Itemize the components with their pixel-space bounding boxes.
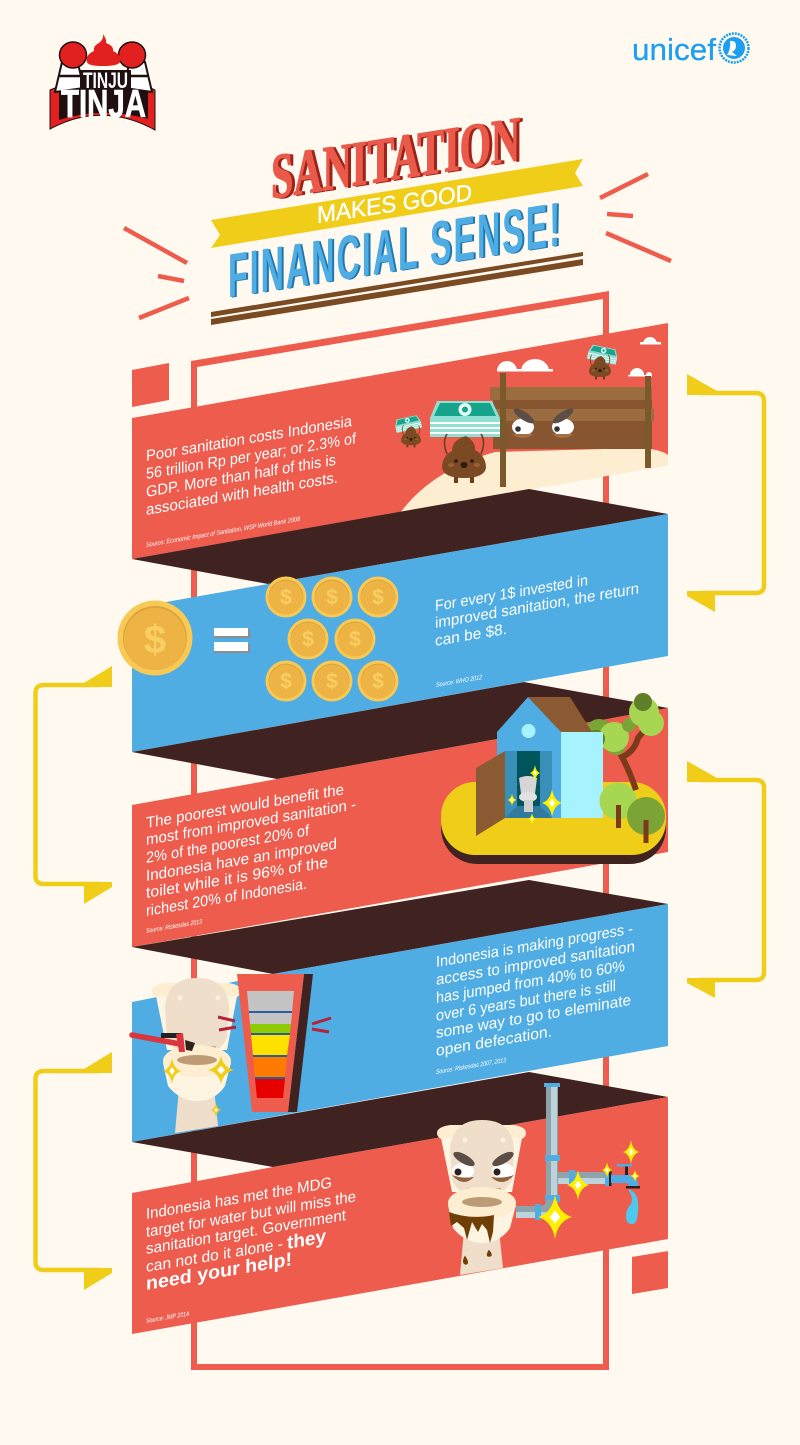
- red motion marks: [218, 1017, 331, 1032]
- panel 5 source: Source: JMP 2014: [146, 1311, 189, 1325]
- title: SANITATION: [271, 103, 523, 213]
- brown stripes: [211, 252, 583, 325]
- sanitation gauge: [237, 974, 313, 1112]
- red frame: [191, 291, 609, 1370]
- panel 4 background: [132, 904, 668, 1142]
- panel 2 text: can be $8.: [435, 621, 507, 650]
- panel 3 text: toilet while it is 96% of the: [146, 854, 328, 902]
- panel 3 source: Source: Riskesdas 2013: [146, 918, 202, 935]
- red square top left: [132, 363, 169, 407]
- panel 4 text: access to improved sanitation: [436, 938, 635, 989]
- panel 2 source: Source: WHO 2012: [436, 674, 482, 689]
- icon: eight coins: $: [302, 628, 314, 651]
- tree: large: [585, 693, 664, 790]
- logo: Tinju Tinja: TINJU: [83, 68, 128, 93]
- icon: eight coins: $: [326, 670, 338, 693]
- panel 3 text: most from improved sanitation -: [146, 796, 356, 849]
- panel 4 text: some way to go to eleminate: [436, 992, 631, 1042]
- panel 3 text: [146, 781, 356, 920]
- panel 3 text: richest 20% of Indonesia.: [146, 876, 307, 920]
- title: [211, 103, 583, 325]
- wooden sign character: [490, 373, 654, 487]
- icon: large coin: [118, 600, 192, 676]
- yellow bracket 4: [36, 1052, 112, 1290]
- burst lines: [124, 174, 671, 318]
- poop holding money: [430, 401, 500, 483]
- panel 1 text: Poor sanitation costs Indonesia: [146, 413, 352, 465]
- panel 5 text: [146, 1174, 356, 1295]
- icon: eight coins: $: [280, 586, 292, 609]
- panel 5 text: they: [287, 1226, 326, 1254]
- panel 4: Indonesia is making progress: [129, 904, 668, 1142]
- sand hill: [400, 448, 668, 513]
- house with open toilet door: [476, 697, 603, 836]
- logo: unicef: unicef: [632, 32, 716, 67]
- logo: Tinju Tinja: TINJA: [61, 83, 146, 126]
- small parachuting poop right: [587, 344, 619, 380]
- panel 2 background: [132, 514, 668, 752]
- dark fold 1: [132, 489, 668, 584]
- panel 5: MDG target: [132, 1083, 668, 1334]
- sparkles: [538, 1140, 640, 1239]
- title: SANITATION: SANITATION: [274, 104, 523, 213]
- panel 3 text: 2% of the poorest 20% of: [146, 822, 310, 867]
- panel 1 text: [146, 413, 357, 519]
- clean toilet character: [152, 978, 241, 1133]
- icon: eight coins: $: [372, 670, 384, 693]
- yellow bracket 2: [36, 666, 112, 904]
- panel 4 source: Source: Riskesdas 2007, 2013: [436, 1057, 506, 1076]
- clouds: [497, 337, 661, 376]
- panel 1: poor sanitation costs: [132, 323, 668, 559]
- panel 1 text: associated with health costs.: [146, 469, 338, 519]
- title: MAKES GOOD: MAKES GOOD: [317, 180, 472, 229]
- yellow bracket 3: [687, 761, 764, 998]
- icon: eight coins: [266, 576, 398, 702]
- title: SANITATION: SANITATION: [271, 103, 520, 212]
- dark fold 2: [132, 682, 668, 779]
- dark fold 4: [132, 1072, 668, 1167]
- panel 4 text: over 6 years but there is still: [436, 977, 616, 1025]
- panel 1 source: Source: Economic Impact of Sanitation, WSP World Bank 2008: [146, 516, 300, 549]
- icon: eight coins: $: [372, 586, 384, 609]
- panel 2 text: improved sanitation, the return: [435, 580, 639, 632]
- icon: eight coins: $: [349, 628, 361, 651]
- panel 3 background: [132, 708, 668, 947]
- panel 4 text: has jumped from 40% to 60%: [436, 958, 625, 1007]
- dark fold 3: [132, 880, 668, 974]
- panel 5 text: need your help!: [146, 1249, 292, 1295]
- tree: small front: [600, 782, 665, 843]
- red square bottom right: [632, 1251, 668, 1294]
- small parachuting poop left: [394, 415, 422, 447]
- panel 4 text: Indonesia is making progress -: [436, 921, 633, 971]
- panel 2 text: [435, 572, 639, 650]
- panel 5 text: sanitation target. Government: [146, 1207, 347, 1258]
- logo: Tinju Tinja: [50, 34, 155, 130]
- panel 2: return on investment: [118, 514, 668, 752]
- panel 3 text: The poorest would benefit the: [146, 781, 344, 832]
- panel 4 text: [436, 921, 635, 1060]
- panel 3 text: Indonesia have an improved: [146, 836, 337, 885]
- panel 2 text: For every 1$ invested in: [435, 572, 588, 615]
- panel 3: the poorest would benefit: [132, 693, 668, 947]
- panel 5 background: [132, 1097, 668, 1334]
- panel 1 background: [132, 323, 668, 559]
- icon: eight coins: $: [326, 586, 338, 609]
- island: [441, 782, 666, 864]
- panel 5 text: Indonesia has met the MDG: [146, 1174, 332, 1223]
- panel 1 text: GDP. More than half of this is: [146, 452, 336, 501]
- title: FINANCIAL SENSE!: [228, 190, 564, 312]
- panel 4 text: open defecation.: [436, 1023, 552, 1060]
- red wrench: [129, 1032, 195, 1052]
- dirty angry toilet character: [437, 1120, 526, 1275]
- ribbon: [211, 159, 583, 248]
- panel 1 text: 56 trillion Rp per year; or 2.3% of: [146, 430, 357, 483]
- icon: eight coins: $: [280, 670, 292, 693]
- panel 5 text: can not do it alone -: [146, 1236, 283, 1276]
- panel 5 text: target for water but will miss the: [146, 1188, 356, 1241]
- equals sign: [214, 628, 250, 653]
- pipes and tap: [516, 1083, 640, 1224]
- icon: large coin: $: [144, 618, 166, 662]
- yellow bracket 1: [687, 374, 764, 612]
